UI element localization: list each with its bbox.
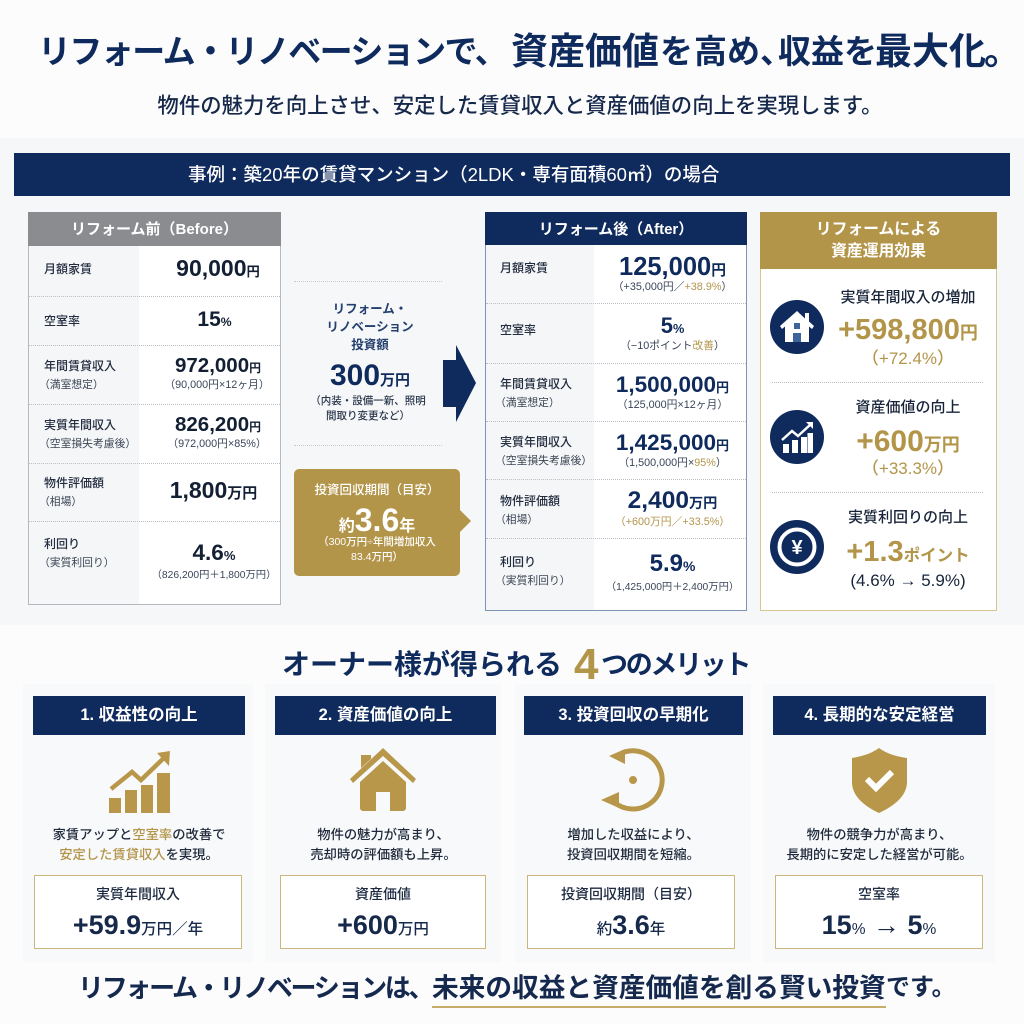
before values: 826,200円 (175, 413, 261, 436)
after values: 125,000円 (619, 253, 726, 281)
before header: リフォーム前（Before） (71, 221, 238, 238)
before row labels: 実質年間収入 (44, 418, 116, 432)
after row labels: （相場） (495, 514, 538, 526)
after row labels: 物件評価額 (500, 494, 560, 508)
after values: 1,500,000円 (616, 372, 729, 397)
after row labels: 月額家賃 (500, 261, 548, 275)
title: 。 (984, 31, 1021, 72)
after values (606, 253, 739, 593)
merits heading (282, 640, 749, 689)
before row labels (39, 262, 136, 568)
card 1 text: 安定した賃貸収入を実現。 (59, 847, 219, 862)
panel: before table (28, 212, 281, 605)
card 1 metric (34, 875, 242, 949)
payback text: 約3.6年 (339, 502, 415, 538)
payback text: （300万円÷年間増加収入 (318, 536, 436, 548)
card 1 (23, 684, 253, 962)
effect: income: +598,800円 (838, 314, 978, 346)
after values: （1,500,000円×95%） (618, 457, 727, 469)
before row labels: （空室損失考慮後） (39, 438, 136, 450)
conclusion: 未来の収益と資産価値を創る賢い投資 (432, 973, 886, 1003)
payback text: 83.4万円） (351, 551, 403, 563)
panel: case study (0, 138, 1024, 625)
arrow: before to after (443, 345, 476, 422)
icon: gold shield (852, 748, 907, 813)
before values (152, 255, 276, 581)
after values: （+35,000円／+38.9%） (613, 281, 732, 293)
case heading: 事例：築20年の賃貸マンション（2LDK・専有面積60㎡）の場合 (188, 164, 719, 185)
after row labels (495, 261, 592, 586)
card 4 metric: 15% → 5% (822, 910, 936, 940)
investment note: （内装・設備一新、照明 (310, 395, 426, 407)
card 2 heading (275, 696, 496, 735)
effect: income (838, 289, 978, 368)
card 1 text: 家賃アップと空室率の改善で (53, 827, 225, 842)
after row labels: （空室損失考慮後） (495, 454, 592, 466)
effect: yield: (4.6% → 5.9%) (850, 571, 966, 590)
before row labels: 月額家賃 (44, 262, 92, 276)
conclusion: リフォーム・リノベーションは、 (78, 973, 432, 1003)
investment label: 投資額 (351, 338, 389, 352)
card 2 metric: 資産価値 (355, 886, 411, 902)
icon: gold house (350, 748, 416, 811)
after label column (486, 245, 594, 610)
conclusion: です。 (886, 974, 956, 1001)
title: リフォーム・リノベーションで、 (38, 33, 506, 70)
card 3 text (567, 827, 700, 862)
title: を (660, 33, 693, 70)
icon: gold cycle (601, 748, 665, 812)
investment label (326, 302, 414, 352)
card 3 (515, 684, 751, 962)
card 4 metric: 空室率 (858, 886, 900, 902)
subtitle: 物件の魅力を向上させ、安定した賃貸収入と資産価値の向上を実現します。 (157, 94, 883, 118)
card 2 text: 物件の魅力が高まり、 (317, 827, 450, 842)
before label column (29, 246, 139, 604)
after row labels: 空室率 (500, 323, 536, 337)
after values: 5% (661, 313, 684, 338)
investment block (294, 281, 442, 446)
before values: 1,800万円 (170, 477, 257, 503)
after header (485, 212, 747, 245)
before values: 15% (197, 308, 232, 331)
card 2 text (310, 827, 457, 862)
after row labels: 利回り (500, 555, 536, 569)
before row labels: 空室率 (44, 314, 80, 328)
card 3 metric: 約3.6年 (597, 910, 665, 940)
card 3 metric (527, 875, 735, 949)
after values: 1,425,000円 (616, 430, 729, 455)
before values: （826,200円＋1,800万円） (152, 570, 276, 581)
card 4 (763, 684, 995, 962)
card 4 metric (775, 875, 983, 949)
card 3 text: 投資回収期間を短縮。 (567, 847, 700, 862)
effect: asset value: 資産価値の向上 (855, 399, 960, 416)
title: 資産価値 (511, 31, 659, 72)
before values: 972,000円 (175, 354, 261, 377)
effect: asset value: +600万円 (856, 425, 960, 458)
card 3 heading: 3. 投資回収の早期化 (558, 706, 709, 724)
after row labels: 実質年間収入 (500, 435, 572, 449)
effect: asset value (855, 399, 960, 478)
merits heading: つのメリット (601, 650, 749, 680)
icon: yen coin: ¥ (791, 537, 803, 559)
after row labels: （満室想定） (495, 396, 560, 408)
card 4 heading (773, 696, 986, 735)
card 2 text: 売却時の評価額も上昇。 (310, 847, 457, 862)
merits heading: 4 (574, 640, 598, 689)
before values: 4.6% (193, 540, 235, 565)
before row labels: 年間賃貸収入 (44, 359, 116, 373)
panel: after table (485, 212, 747, 611)
card 2 metric: +600万円 (337, 910, 429, 940)
after values: （−10ポイント改善） (620, 340, 725, 352)
after values: （125,000円×12ヶ月） (617, 399, 728, 411)
icon: house (770, 300, 824, 354)
investment note (310, 395, 426, 422)
effect header (760, 212, 997, 269)
title: 高め、 (694, 33, 793, 70)
after values: （+600万円／+33.5%） (615, 516, 730, 528)
before header (28, 212, 281, 246)
before row labels: （満室想定） (39, 378, 104, 390)
effect: income: （+72.4%） (862, 349, 954, 368)
investment amount: 300万円 (330, 359, 410, 392)
payback text (314, 483, 440, 563)
card 1 metric: +59.9万円／年 (73, 910, 203, 940)
before row labels: （相場） (39, 496, 82, 508)
card 3 text: 増加した収益により、 (567, 827, 700, 842)
case heading bar (14, 153, 1010, 196)
card 4 text: 物件の競争力が高まり、 (807, 827, 952, 842)
title (38, 31, 1021, 72)
before row labels: 利回り (44, 537, 80, 551)
payback text: 投資回収期間（目安） (314, 483, 440, 497)
panel: asset effect (760, 212, 997, 611)
before values: （972,000円×85%） (167, 438, 267, 450)
merits heading: オーナー様が得られる (282, 649, 562, 680)
icon: growth chart (770, 410, 824, 464)
card 1 heading (33, 696, 245, 735)
after values: 5.9% (650, 550, 695, 577)
icon: yen coin (770, 520, 824, 574)
before values: （90,000円×12ヶ月） (164, 379, 270, 391)
before values: 90,000円 (176, 255, 260, 281)
title: 最大化 (875, 31, 986, 72)
conclusion (78, 973, 956, 1008)
card 4 heading: 4. 長期的な安定経営 (804, 706, 955, 724)
effect: income: 実質年間収入の増加 (840, 289, 976, 306)
after row labels: 年間賃貸収入 (500, 377, 572, 391)
after row labels: （実質利回り） (495, 574, 571, 586)
card 1 metric: 実質年間収入 (96, 886, 180, 902)
after values: 2,400万円 (628, 487, 717, 514)
investment label: リフォーム・ (333, 302, 407, 316)
effect: yield: +1.3ポイント (846, 536, 970, 568)
card 4 text (786, 827, 973, 862)
card 1 text (53, 827, 225, 862)
payback callout (294, 469, 471, 576)
investment note: 間取り変更など） (326, 410, 410, 422)
card 2 heading: 2. 資産価値の向上 (319, 706, 452, 724)
after values: （1,425,000円＋2,400万円） (606, 582, 739, 593)
effect: yield: 実質利回りの向上 (848, 509, 968, 526)
before row labels: （実質利回り） (39, 556, 115, 568)
effect header: リフォームによる (816, 221, 941, 238)
before row labels: 物件評価額 (44, 476, 104, 490)
title: 収益を (778, 33, 877, 70)
effect: yield (846, 509, 970, 590)
icon: gold chart (109, 751, 170, 813)
card 2 metric (280, 875, 486, 949)
effect header: 資産運用効果 (831, 243, 926, 260)
card 1 heading: 1. 収益性の向上 (80, 706, 198, 724)
after header: リフォーム後（After） (539, 221, 693, 238)
card 2 (265, 684, 501, 962)
card 3 heading (524, 696, 743, 735)
investment label: リノベーション (326, 320, 414, 334)
card 3 metric: 投資回収期間（目安） (561, 886, 701, 902)
card 4 text: 長期的に安定した経営が可能。 (786, 847, 973, 862)
effect: asset value: （+33.3%） (862, 459, 954, 478)
